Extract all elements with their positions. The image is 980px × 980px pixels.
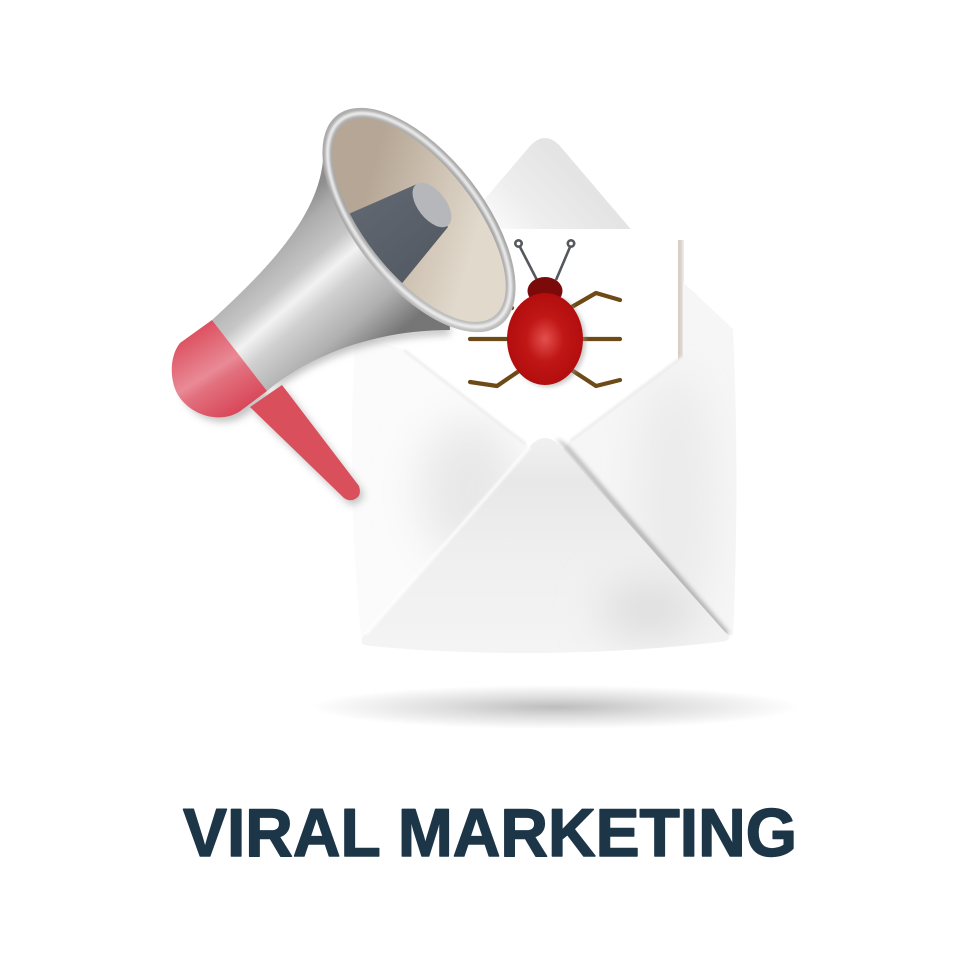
front flap soft shade xyxy=(602,582,698,638)
letter edge shadow xyxy=(674,240,684,362)
bug body xyxy=(507,293,583,385)
envelope left panel xyxy=(406,410,524,554)
front flap shadow xyxy=(556,438,729,638)
letter sheet xyxy=(400,229,678,470)
pocket edge shading xyxy=(404,350,683,444)
envelope front flap xyxy=(361,438,729,653)
bug body shadow xyxy=(510,295,586,387)
envelope xyxy=(340,138,750,660)
megaphone xyxy=(172,108,516,508)
megaphone horn xyxy=(212,160,450,391)
bug antennae xyxy=(515,240,574,280)
megaphone handle xyxy=(250,385,360,500)
driver cap xyxy=(405,176,459,234)
floor shadow xyxy=(310,685,800,729)
envelope back flap xyxy=(450,138,640,240)
megaphone end cap xyxy=(172,320,267,417)
rim highlight xyxy=(294,83,544,357)
megaphone shadow xyxy=(182,325,450,505)
title: VIRAL MARKETING xyxy=(183,795,797,871)
bug icon xyxy=(470,240,620,387)
infographic canvas xyxy=(172,108,794,858)
envelope right panel xyxy=(564,282,736,636)
bug legs xyxy=(470,293,620,386)
bug head xyxy=(528,277,562,305)
megaphone rim xyxy=(286,75,552,365)
megaphone inner cone xyxy=(301,90,537,350)
front flap left highlight xyxy=(366,447,530,634)
megaphone driver xyxy=(350,184,448,283)
